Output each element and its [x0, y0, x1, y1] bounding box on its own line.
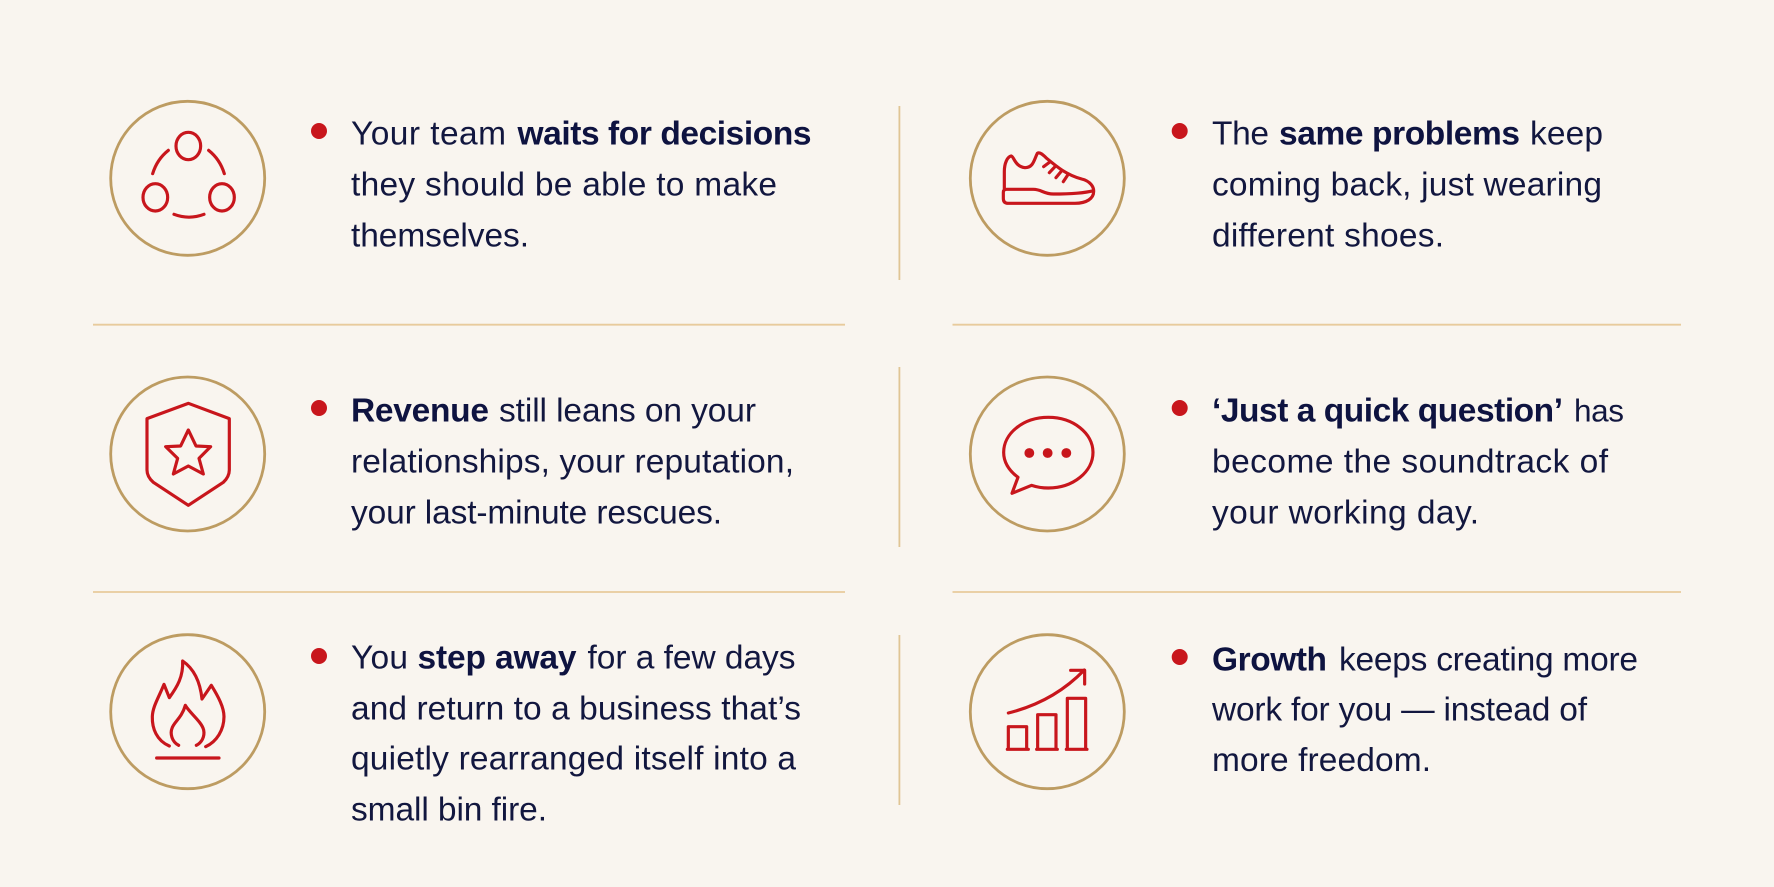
panel: revenue — [111, 377, 794, 532]
icon: shield with star — [111, 377, 265, 531]
bullet — [1172, 123, 1188, 139]
panel: same problems — [970, 101, 1603, 255]
text block: work for you — instead of — [1211, 692, 1588, 728]
text block: they should be able to make — [351, 166, 777, 204]
text block: quietly rearranged itself into a — [351, 740, 796, 778]
bullet — [1172, 400, 1188, 416]
panel: step away — [111, 635, 801, 828]
icon: flame — [111, 635, 265, 789]
text block: Growth — [1212, 642, 1327, 678]
text block: different shoes. — [1212, 218, 1444, 254]
text block — [351, 116, 812, 254]
text block — [351, 392, 794, 532]
text block: relationships, your reputation, — [351, 444, 794, 480]
text block: and return to a business that’s — [351, 690, 801, 728]
text block: Revenue — [351, 392, 489, 430]
text block — [351, 640, 801, 828]
text block: The — [1212, 116, 1269, 152]
text block: become the soundtrack of — [1212, 444, 1609, 480]
text block — [1212, 392, 1624, 532]
icon: growth chart — [970, 635, 1124, 789]
text block: themselves. — [351, 218, 529, 254]
text block: coming back, just wearing — [1212, 166, 1602, 204]
panel: growth — [970, 635, 1638, 789]
text block: small bin fire. — [351, 792, 547, 828]
icon: speech bubble — [970, 377, 1124, 531]
icon: shoe — [970, 101, 1124, 255]
text block: waits for decisions — [516, 116, 812, 152]
text block: Your team — [351, 116, 506, 152]
text block: You — [351, 640, 408, 676]
text block: still leans on your — [499, 392, 756, 430]
text block: has — [1574, 392, 1624, 428]
bullet — [311, 648, 327, 664]
bullet — [311, 400, 327, 416]
text block: your last-minute rescues. — [351, 494, 722, 532]
text block: more freedom. — [1212, 742, 1431, 779]
bullet — [1172, 649, 1188, 665]
icon: team circle — [111, 101, 265, 255]
text block: keep — [1530, 116, 1603, 152]
text block: same problems — [1279, 116, 1520, 152]
text block: keeps creating more — [1339, 642, 1638, 678]
text block — [1211, 642, 1638, 779]
text block — [1212, 116, 1603, 254]
text block: your working day. — [1212, 494, 1479, 532]
bullet — [311, 123, 327, 139]
panel: team waits for decisions — [111, 101, 811, 255]
text block: step away — [418, 640, 577, 676]
text block: for a few days — [588, 640, 796, 676]
text block: ‘Just a quick question’ — [1212, 392, 1563, 430]
panel: quick question — [970, 377, 1624, 532]
